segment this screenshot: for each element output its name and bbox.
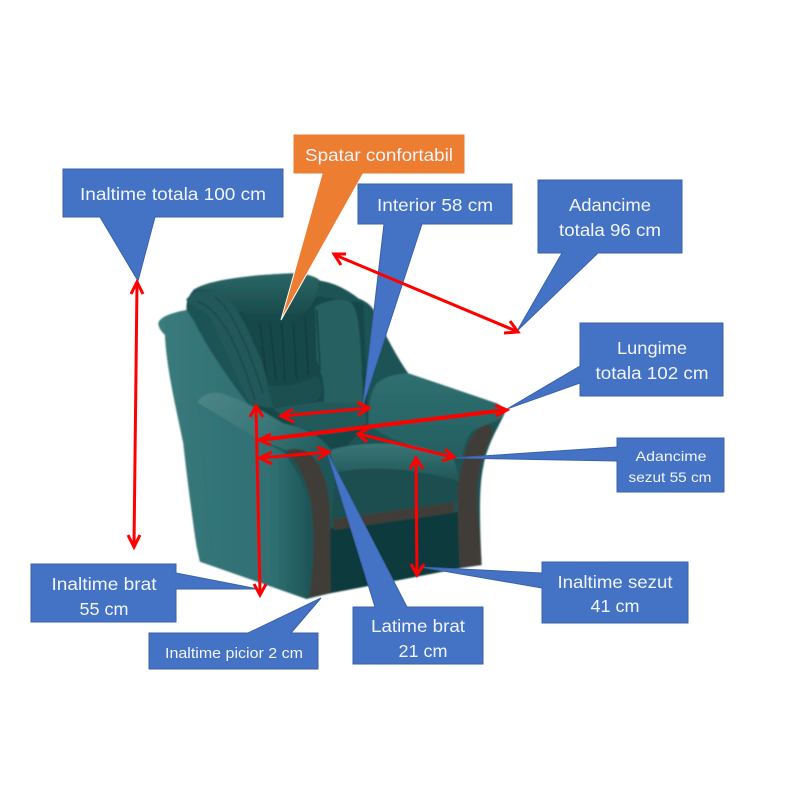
lumbar roll bbox=[267, 375, 322, 407]
callout: Interior 58 cm: Interior 58 cm bbox=[377, 195, 493, 215]
front panel lower bbox=[330, 512, 460, 593]
callout: Lungime totala 102 cm: totala 102 cm bbox=[596, 363, 708, 383]
right arm bbox=[368, 373, 505, 458]
front panel upper bbox=[332, 469, 458, 518]
callout: Adancime sezut 55 cm bbox=[452, 438, 724, 492]
left cushion roll bbox=[186, 291, 275, 408]
callout: Inaltime picior 2 cm: Inaltime picior 2 cm bbox=[165, 646, 303, 662]
seat top bbox=[328, 444, 458, 482]
arrow: arm height bbox=[250, 406, 266, 595]
left wooden trim bbox=[287, 449, 331, 597]
left wing and outer side bbox=[158, 310, 250, 562]
callout: Inaltime totala 100 cm bbox=[63, 169, 283, 281]
callout: Inaltime sezut 41 cm: Inaltime sezut bbox=[558, 572, 673, 592]
callout: Latime brat 21 cm: Latime brat bbox=[371, 616, 465, 636]
left arm front face bbox=[198, 403, 313, 599]
callout: Inaltime brat 55 cm: Inaltime brat bbox=[52, 574, 157, 594]
callout: Inaltime totala 100 cm: Inaltime totala 100 cm bbox=[80, 184, 266, 204]
callout: Interior 58 cm bbox=[358, 184, 512, 405]
arrow: total length bbox=[259, 405, 507, 445]
cushion right panel bbox=[315, 300, 363, 403]
callout: Adancime totala 96 cm: totala 96 cm bbox=[559, 220, 661, 240]
callout: Inaltime brat 55 cm bbox=[31, 564, 258, 622]
callout: Adancime sezut 55 cm: Adancime bbox=[636, 448, 707, 464]
armchair illustration bbox=[158, 273, 505, 599]
callout: Latime brat 21 cm bbox=[327, 452, 483, 664]
cushion pleats bbox=[260, 310, 320, 407]
callout: Spatar confortabil (orange): Spatar confortabil bbox=[305, 145, 453, 165]
cushion centre bbox=[210, 297, 368, 450]
arrow: seat height bbox=[410, 458, 424, 575]
callout: Inaltime picior 2 cm bbox=[149, 598, 321, 669]
arrow: arm width bbox=[260, 447, 329, 464]
left inner post bbox=[317, 452, 335, 520]
arrow: total height bbox=[128, 282, 143, 547]
callout: Inaltime sezut 41 cm bbox=[420, 562, 688, 623]
callout: Lungime totala 102 cm bbox=[507, 323, 723, 409]
callout: Adancime totala 96 cm: Adancime bbox=[569, 195, 651, 215]
callout: Inaltime brat 55 cm: 55 cm bbox=[80, 599, 128, 619]
headrest bbox=[193, 273, 318, 322]
callout: Spatar confortabil (orange) bbox=[281, 134, 465, 320]
arrow: interior width bbox=[281, 402, 369, 422]
chair silhouette base bbox=[158, 273, 505, 599]
arrow: total depth bbox=[334, 254, 518, 333]
callout: Adancime sezut 55 cm: sezut 55 cm bbox=[628, 469, 712, 485]
wooden front rail bbox=[333, 502, 454, 530]
right wooden trim bbox=[457, 425, 492, 567]
callout: Adancime totala 96 cm bbox=[517, 180, 682, 331]
roll wrinkles bbox=[197, 297, 263, 400]
callout: Latime brat 21 cm: 21 cm bbox=[398, 641, 448, 661]
callout: Inaltime sezut 41 cm: 41 cm bbox=[590, 596, 640, 616]
cushion lower panel bbox=[273, 402, 367, 435]
arrow: seat depth bbox=[358, 428, 454, 461]
left arm top bbox=[197, 393, 332, 468]
callout: Lungime totala 102 cm: Lungime bbox=[617, 338, 687, 358]
